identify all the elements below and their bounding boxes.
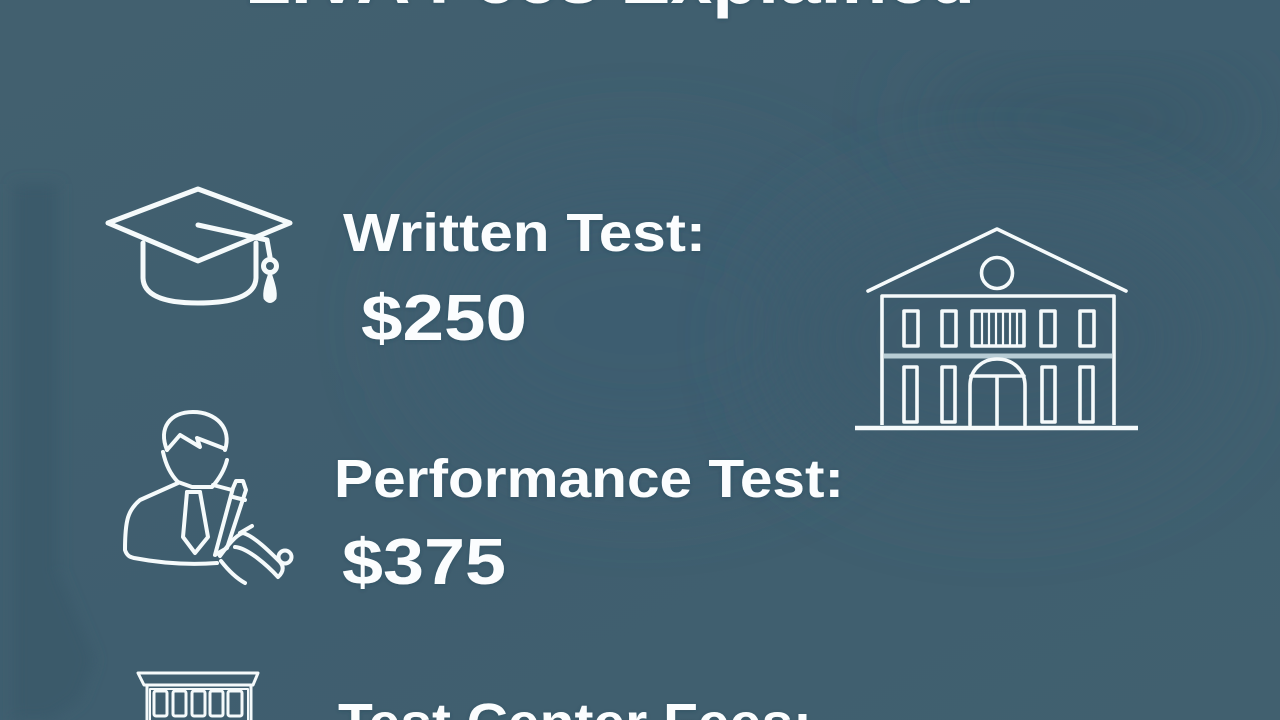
icon: person with pen bbox=[125, 412, 292, 583]
written test price: $250 bbox=[361, 281, 527, 354]
written test label: Written Test: bbox=[343, 203, 706, 263]
icon: courthouse building bbox=[855, 229, 1138, 428]
performance test price: $375 bbox=[342, 525, 506, 598]
performance test label: Performance Test: bbox=[334, 449, 844, 509]
icon: graduation cap bbox=[108, 189, 290, 303]
icon: test center building bbox=[138, 673, 258, 720]
